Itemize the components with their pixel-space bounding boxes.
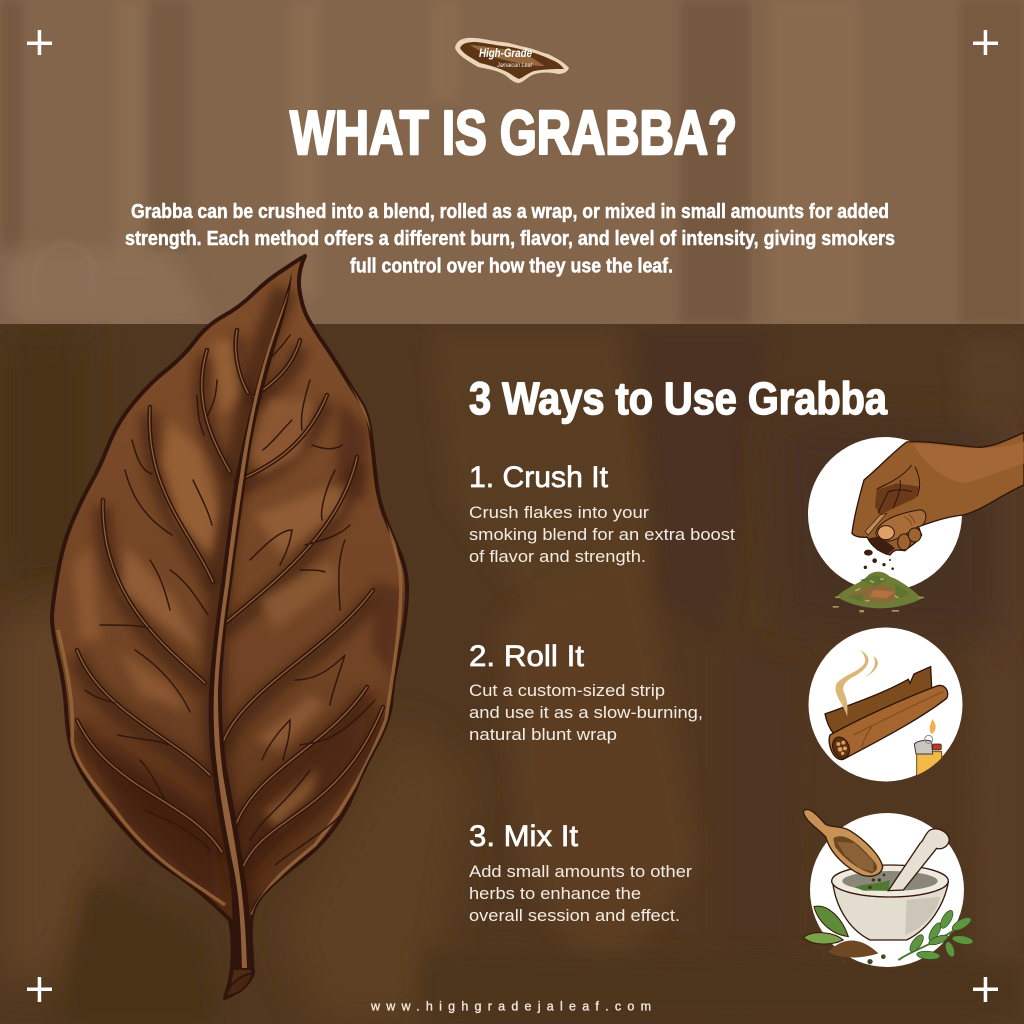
shadow along veins xyxy=(77,290,383,920)
footer website: www.highgradejaleaf.com xyxy=(370,1000,651,1014)
step 3 text: overall session and effect. xyxy=(469,906,680,925)
logo: Jamaica-shaped badge: Jamaican Leaf xyxy=(496,62,533,69)
step 1 text: Crush flakes into your xyxy=(469,503,649,522)
step 2 text: Cut a custom-sized strip xyxy=(469,681,665,700)
step 2 text xyxy=(469,640,703,744)
section heading: 3 Ways to Use Grabba xyxy=(469,373,888,424)
header panel: lighter background band xyxy=(0,0,1024,324)
intro paragraph xyxy=(125,200,895,278)
step 1 text: of flavor and strength. xyxy=(469,547,646,566)
step 3 text: herbs to enhance the xyxy=(469,884,641,903)
stem cut xyxy=(226,973,253,996)
title: WHAT IS GRABBA? xyxy=(290,99,737,168)
light highlights xyxy=(72,335,345,828)
midrib xyxy=(209,272,292,970)
intro paragraph: strength. Each method offers a different burn, flavor, and level of intensity, giving smokers xyxy=(125,227,895,250)
step 3 text: 3. Mix It xyxy=(469,820,579,853)
dark shading in lower half xyxy=(90,400,405,910)
step 2 text: and use it as a slow-burning, xyxy=(469,703,703,722)
step 1 text: smoking blend for an extra boost xyxy=(469,525,735,544)
veins xyxy=(77,330,383,867)
step 3 text xyxy=(469,820,692,925)
step 2 icon: rolled blunt wrap and lighter xyxy=(808,628,962,782)
rim highlight xyxy=(56,382,402,915)
intro paragraph: Grabba can be crushed into a blend, rolled as a wrap, or mixed in small amounts for added xyxy=(131,200,889,223)
illustration: tobacco leaf xyxy=(52,256,407,998)
step 1 text xyxy=(469,461,735,566)
step 2 text: 2. Roll It xyxy=(469,640,585,673)
logo: Jamaica-shaped badge xyxy=(455,38,569,83)
step 2 text: natural blunt wrap xyxy=(469,725,617,744)
step 3 text: Add small amounts to other xyxy=(469,862,692,881)
step 1 icon: hand crumbling flakes xyxy=(808,433,1024,612)
lower background: tobacco leaf texture xyxy=(0,324,1024,1024)
step 1 text: 1. Crush It xyxy=(469,461,609,494)
intro paragraph: full control over how they use the leaf. xyxy=(350,254,673,278)
logo: Jamaica-shaped badge: High-Grade xyxy=(479,46,532,60)
step 3 icon: mortar, pestle, scoop and herbs xyxy=(803,809,974,967)
